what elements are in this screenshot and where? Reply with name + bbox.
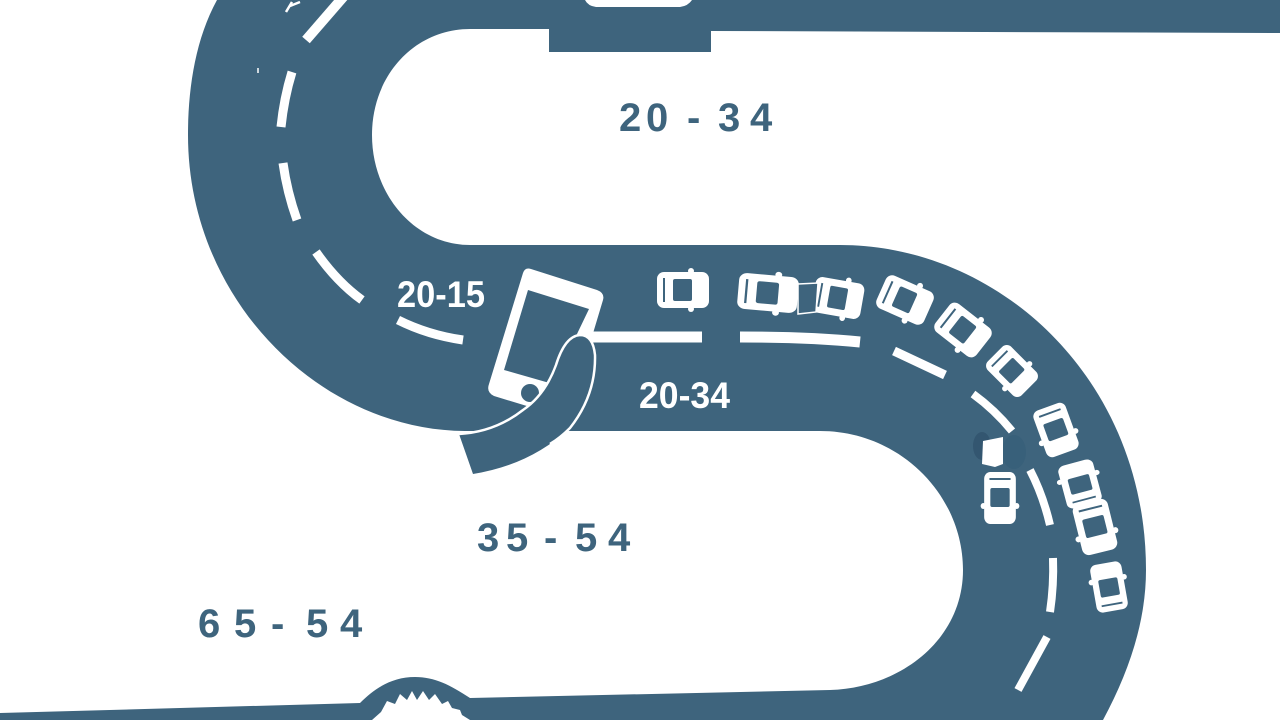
car 4 <box>872 269 938 331</box>
car 7 <box>1028 400 1084 460</box>
car 5 <box>929 297 997 363</box>
icon: gear sunburst <box>372 691 470 720</box>
label: 20 - 34 heading: 20 - 34 <box>619 96 773 140</box>
road label: 20-34: 20-34 <box>639 375 730 416</box>
label: 35 - 54 heading: 35 - 54 <box>477 516 631 560</box>
cars in traffic queue <box>657 268 1132 614</box>
car 6 <box>981 340 1043 402</box>
phone home button <box>521 384 539 402</box>
car 10 <box>1086 560 1132 614</box>
small road marks <box>258 2 300 73</box>
crashed car <box>973 432 1026 469</box>
car 11 <box>981 472 1019 524</box>
hand <box>459 335 595 474</box>
top sign notch <box>585 0 692 7</box>
car 9 <box>1067 496 1123 558</box>
phone screen <box>504 290 589 384</box>
phone body <box>488 268 603 410</box>
road label: 20-15: 20-15 <box>397 274 485 315</box>
hand outline <box>459 335 595 444</box>
car 3 <box>810 272 866 324</box>
car 1 <box>657 268 709 312</box>
icon: phone in hand <box>459 268 603 474</box>
collision link between cars 2 and 3 <box>798 283 818 314</box>
car 2 <box>736 268 800 318</box>
road centre line dashes <box>281 0 1053 690</box>
car 8 <box>1053 457 1107 511</box>
label: 65 - 54 heading: 65 - 54 <box>198 602 363 646</box>
